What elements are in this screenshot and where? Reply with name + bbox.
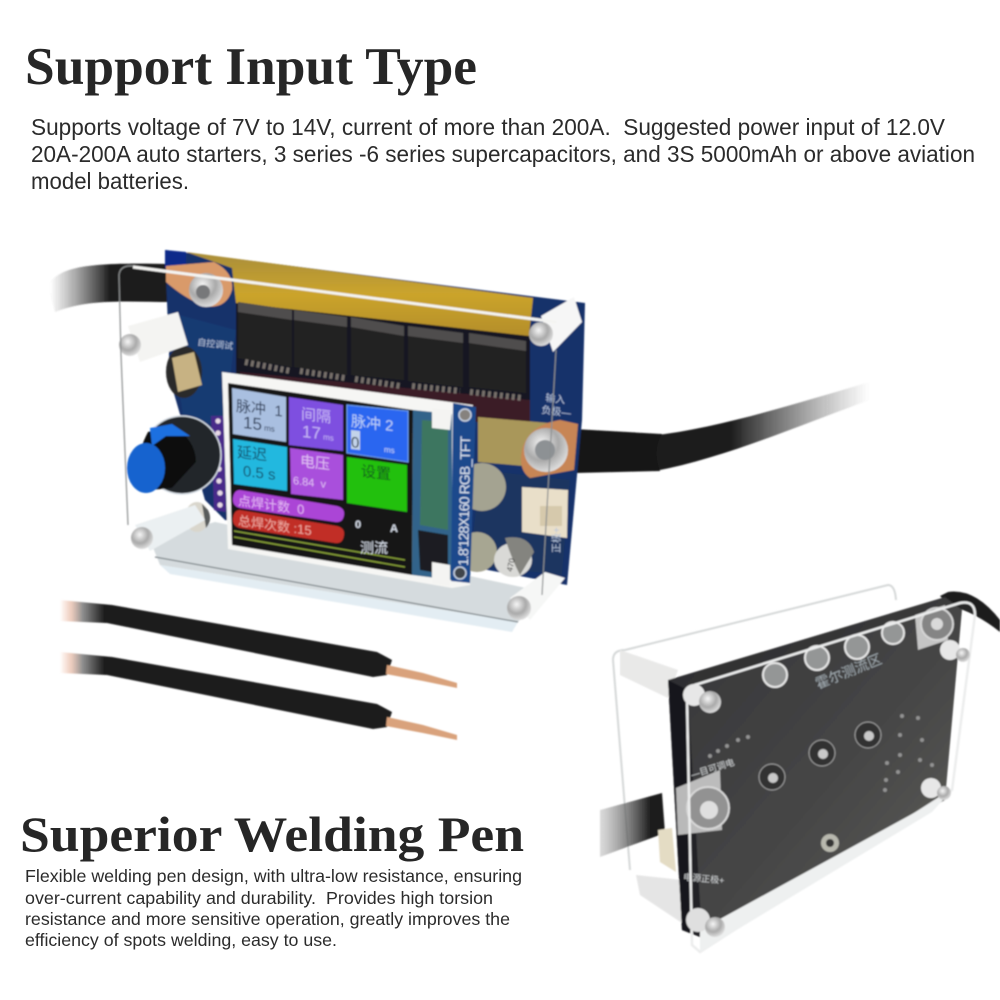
icon: blue potentiometer knob <box>127 416 221 494</box>
current reading <box>355 519 398 556</box>
tile: interval: 17 ms <box>302 422 334 445</box>
corner screws <box>683 640 970 937</box>
front acrylic bottom strip <box>700 790 952 952</box>
hall sensor silk text: 霍尔测流区 <box>813 651 884 692</box>
board silk text: 正极+ <box>550 527 563 553</box>
left copper lug and bolt <box>166 262 232 307</box>
large terminal nut <box>676 770 729 835</box>
rear circuit board <box>668 597 962 935</box>
rear connector <box>658 828 676 872</box>
middle nuts row <box>759 722 881 790</box>
tile: delay <box>233 439 287 491</box>
photo: welding pen 1 <box>60 600 457 688</box>
bar: total weld count: 总焊次数 :15 <box>238 513 312 538</box>
rear cable top <box>940 592 1000 632</box>
rear silk text: —目可调电 <box>689 756 736 780</box>
text block: input description <box>31 114 975 194</box>
circuit board <box>165 250 585 585</box>
tile: delay: 0.5 s <box>243 463 276 484</box>
text block: welding pen description: Flexible welding pen design, with ultra-low resistance, ensuring <box>25 866 522 886</box>
right copper lug and bolt <box>521 420 578 478</box>
tile: interval <box>289 397 343 451</box>
text block: welding pen description <box>25 866 522 950</box>
text block: welding pen description: resistance and more sensitive operation, greatly improves the <box>25 909 510 929</box>
icon: right power cable <box>574 382 875 473</box>
capacitors: 470 <box>505 557 517 572</box>
standoff: bottom right <box>507 572 565 620</box>
acrylic front outline <box>119 266 556 595</box>
tile: pulse 2: 0 <box>351 434 359 452</box>
rear terminal plate <box>915 605 948 650</box>
large top nut <box>921 608 953 640</box>
bar: spot weld count: 点焊计数 0 <box>238 493 304 517</box>
tile: voltage: 6.84 v <box>293 475 326 491</box>
standoff: bottom left <box>131 505 205 551</box>
board silk text: 负极— <box>541 403 572 420</box>
photo: welder rear view <box>600 585 1000 952</box>
tile: voltage: 电压 <box>300 453 330 474</box>
tile: pulse 2 <box>347 405 408 462</box>
tile: pulse 1: 脉冲 1 <box>236 398 283 421</box>
green progress lines <box>234 531 405 567</box>
front acrylic plate <box>687 602 975 952</box>
terminal connector <box>522 487 568 538</box>
standoff: top right <box>529 297 582 352</box>
left switch component <box>166 346 202 398</box>
tile: delay: 延迟 <box>237 444 267 465</box>
rear standoffs <box>620 650 685 925</box>
photo: welder front view <box>48 250 875 632</box>
text block: welding pen description: over-current capability and durability. Provides high torsion <box>25 888 493 908</box>
photo: welding pen 2 <box>60 652 457 740</box>
screen background <box>228 383 413 575</box>
purple header pins <box>211 416 226 512</box>
MOSFET row <box>238 302 526 398</box>
capacitors <box>457 463 534 577</box>
board silk text <box>197 336 572 553</box>
rear cable <box>600 793 665 857</box>
top nuts row <box>763 622 904 687</box>
bar: total weld count <box>233 510 344 543</box>
gold copper bus bar <box>186 252 533 336</box>
acrylic base plate <box>150 522 545 632</box>
text block: welding pen description: efficiency of spots welding, easy to use. <box>25 930 337 950</box>
standoff: top left <box>119 312 188 362</box>
mounting hole <box>821 834 839 852</box>
current reading: 测流 <box>360 540 388 556</box>
small silver capacitor <box>185 502 210 532</box>
board black edge <box>668 680 702 938</box>
back acrylic plate <box>613 585 896 870</box>
tile: voltage <box>290 448 343 500</box>
board silk text: 输入 <box>545 391 566 406</box>
module blue label strip: 1.8'128X160 RGB_TFT <box>455 435 473 566</box>
polarity silk text: 电源正极+ <box>683 871 725 886</box>
module white PCB <box>222 372 473 588</box>
icon: left power cable <box>48 264 172 312</box>
current reading: 0 <box>355 519 361 531</box>
tile: interval: 间隔 <box>301 406 331 427</box>
bar: spot weld count <box>233 490 344 522</box>
tile: pulse 2: 脉冲 2 <box>351 413 394 435</box>
tile: settings <box>347 457 407 512</box>
title: Superior Welding Pen: Superior Welding Pen <box>20 806 524 862</box>
current reading: A <box>390 523 398 535</box>
module blue label strip <box>451 403 476 583</box>
text block: input description: model batteries. <box>31 168 189 194</box>
tile: settings: 设置 <box>361 463 391 484</box>
tile: pulse 1: 15 ms <box>243 413 275 436</box>
board silk text: 自控调试 <box>197 336 234 351</box>
text block: input description: 20A-200A auto starters, 3 series -6 series supercapacitors, and 3S 5000mAh or above aviation <box>31 141 975 167</box>
tile: pulse 1 <box>232 388 286 442</box>
TFT display module <box>222 372 476 588</box>
solder pads <box>708 714 934 792</box>
text block: input description: Supports voltage of 7V to 14V, current of more than 200A. Suggested power input of 12.0V <box>31 114 946 140</box>
module side ribbon <box>412 408 452 586</box>
title: Support Input Type: Support Input Type <box>25 38 477 96</box>
tile: pulse 2: ms <box>384 445 395 455</box>
